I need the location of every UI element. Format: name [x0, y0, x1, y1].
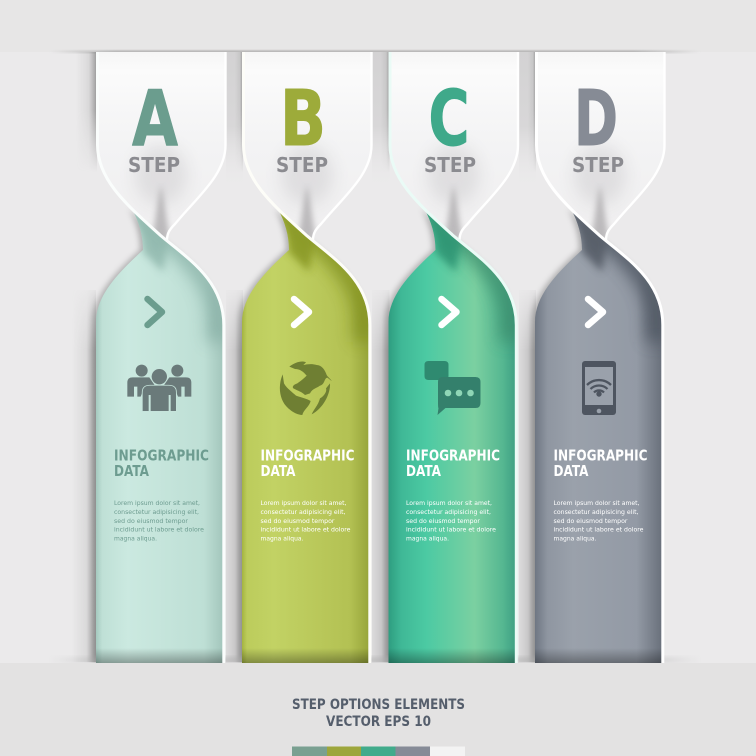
chevron [442, 299, 456, 325]
ribbon upper A [97, 52, 226, 240]
panel: step D [535, 52, 665, 663]
step label: STEP [276, 153, 328, 177]
letter A: A [132, 75, 178, 164]
heading [406, 446, 500, 480]
body text [114, 499, 204, 543]
step label: STEP [128, 153, 180, 177]
ribbon edge B [244, 52, 370, 663]
heading: DATA [114, 462, 149, 480]
chevron [294, 299, 309, 325]
ribbon upper C [390, 52, 518, 240]
body text [554, 499, 644, 543]
step label: STEP [424, 153, 476, 177]
footer title [292, 697, 465, 730]
bottom ledge [0, 657, 756, 756]
letter D: D [574, 75, 618, 164]
heading: INFOGRAPHIC [554, 446, 648, 464]
ribbon edge A [98, 52, 224, 663]
ribbon lower D [535, 205, 662, 663]
heading: DATA [406, 462, 441, 480]
footer title: VECTOR EPS 10 [326, 714, 431, 730]
icon: smartphone wifi [582, 361, 616, 415]
ribbon lower A [96, 205, 223, 663]
icon: people [127, 365, 191, 411]
chevron [588, 299, 603, 325]
letter B: B [280, 75, 326, 164]
chevron [148, 299, 162, 325]
heading: INFOGRAPHIC [260, 446, 354, 464]
heading [260, 446, 354, 480]
heading: INFOGRAPHIC [406, 446, 500, 464]
colour swatch bar [292, 746, 465, 756]
body text [260, 499, 351, 543]
heading [114, 446, 209, 480]
heading [554, 446, 648, 480]
ribbon upper B [243, 52, 372, 240]
ribbon upper D [536, 52, 665, 240]
ribbon edge C [390, 52, 516, 663]
icon: chat bubbles [424, 361, 480, 415]
footer title: STEP OPTIONS ELEMENTS [292, 697, 465, 713]
letter C: C [428, 75, 470, 164]
panel: step A [96, 52, 226, 663]
heading: INFOGRAPHIC [114, 446, 209, 464]
top slit shadow [50, 50, 700, 53]
ribbon edge D [536, 52, 663, 663]
panel: step C [388, 52, 518, 663]
step label: STEP [572, 153, 624, 177]
ribbon lower B [242, 205, 369, 663]
heading: DATA [554, 462, 589, 480]
panel: step B [242, 52, 372, 663]
icon: globe [280, 362, 332, 415]
lower gaps and shadows [78, 210, 582, 663]
upper gaps and shadows [82, 52, 536, 168]
heading: DATA [260, 462, 296, 480]
ribbon lower C [388, 205, 516, 663]
body text [406, 499, 496, 543]
